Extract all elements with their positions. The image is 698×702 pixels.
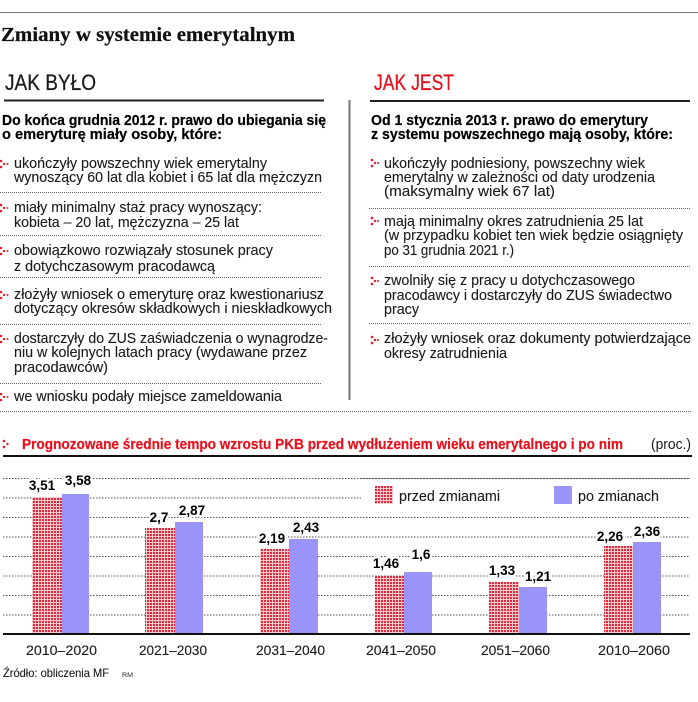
list item 1 [0,156,322,186]
source: RM [122,673,133,679]
list item 2: po 31 grudnia 2021 r.) [384,243,514,259]
legend: przed zmianami [399,488,500,505]
list item 3: z dotychczasowym pracodawcą [14,259,216,275]
group 2051–2060: 2051–2060 [481,643,550,658]
list item 5: dostarczyły do ZUS zaświadczenia o wynagrodze- [14,331,328,347]
chart heading: Prognozowane średnie tempo wzrostu PKB przed wydłużeniem wieku emerytalnego i po nim [22,437,623,453]
list item 1: ukończyły podniesiony, powszechny wiek [384,156,646,172]
list item 5: pracodawców) [14,360,108,376]
list item 4: złożyły wniosek o emeryturę oraz kwestionariusz [14,287,324,303]
group 2010–2020: 2010–2020 [26,643,97,658]
list item 2: kobieta – 20 lat, mężczyzna – 25 lat [14,215,239,231]
group 2010–2060: 2010–2060 [598,643,670,658]
list item 4 [371,331,691,362]
group 2010–2020: 3,51 [29,478,56,493]
list item 2: mają minimalny okres zatrudnienia 25 lat [384,214,643,230]
group 2031–2040: 2031–2040 [256,643,325,658]
list item 3 [371,273,672,318]
list item 3: pracodawcy i dostarczyły do ZUS świadectwo [384,288,672,304]
list item 2: miały minimalny staż pracy wynoszący: [14,200,262,216]
group 2041–2050: 2041–2050 [366,643,436,658]
group 2021–2030: 2,87 [179,503,205,518]
intro: jak było [2,113,326,143]
legend: po zmianach [578,488,659,505]
intro: jak jest: Od 1 stycznia 2013 r. prawo do emerytury [371,113,648,129]
list item 1: (maksymalny wiek 67 lat) [384,184,555,200]
list item 4: złożyły wniosek oraz dokumenty potwierdzające [384,331,691,347]
intro: jak jest [371,113,673,143]
list item 3: obowiązkowo rozwiązały stosunek pracy [14,243,274,259]
group 2021–2030: 2021–2030 [139,643,207,658]
list item 5 [0,331,328,376]
source: Źródło: obliczenia MF [3,665,109,680]
group 2021–2030: 2,7 [150,510,168,525]
group 2010–2060: 2,36 [634,524,661,539]
group 2010–2060: 2,26 [597,529,624,544]
intro: jak jest: z systemu powszechnego mają osoby, które: [371,127,673,143]
group 2031–2040: 2,19 [259,531,285,546]
group 2051–2060: 1,21 [525,569,552,584]
group 2041–2050 [366,547,436,658]
list item 3 [0,243,274,275]
list item 5: niu w kolejnych latach pracy (wydawane przez [14,345,307,361]
list item 2: (w przypadku kobiet ten wiek będzie osiągnięty [384,228,684,244]
heading: jak było: JAK BYŁO [5,70,96,95]
intro: jak było: Do końca grudnia 2012 r. prawo do ubiegania się [2,113,326,129]
list item 1: wynoszący 60 lat dla kobiet i 65 lat dla mężczyzn [13,170,322,186]
list item 2 [0,200,262,231]
list item 3: zwolniły się z pracy u dotychczasowego [384,273,635,289]
panel: jak było [0,70,332,405]
list item 3: pracy [384,302,420,318]
list item 6: we wniosku podały miejsce zameldowania [13,389,283,405]
legend [361,478,690,508]
intro: jak było: o emeryturę miały osoby, które: [2,127,222,143]
group 2010–2020 [26,473,97,658]
list item 4 [0,287,332,317]
list item 1 [371,156,656,200]
group 2051–2060: 1,33 [489,563,516,578]
list item 1: emerytalny w zależności od daty urodzenia [384,170,656,186]
heading: jak jest: JAK JEST [374,70,454,95]
icon: bullet [3,440,9,448]
chart heading: (proc.) [651,437,691,453]
list item 1: ukończyły powszechny wiek emerytalny [14,156,268,172]
group 2041–2050: 1,46 [373,556,400,571]
title: Zmiany w systemie emerytalnym [1,24,295,46]
panel: jak jest [369,70,691,362]
list item 2 [371,214,684,259]
group 2021–2030 [139,503,207,658]
group 2031–2040 [256,520,325,658]
list item 4: dotyczący okresów składkowych i nieskładkowych [14,301,332,317]
group 2031–2040: 2,43 [293,520,320,535]
group 2041–2050: 1,6 [412,547,431,562]
group 2051–2060 [481,563,552,658]
group 2010–2020: 3,58 [65,473,92,488]
list item 4: okresy zatrudnienia [384,346,508,362]
bar chart [3,473,690,658]
group 2010–2060 [597,524,670,658]
